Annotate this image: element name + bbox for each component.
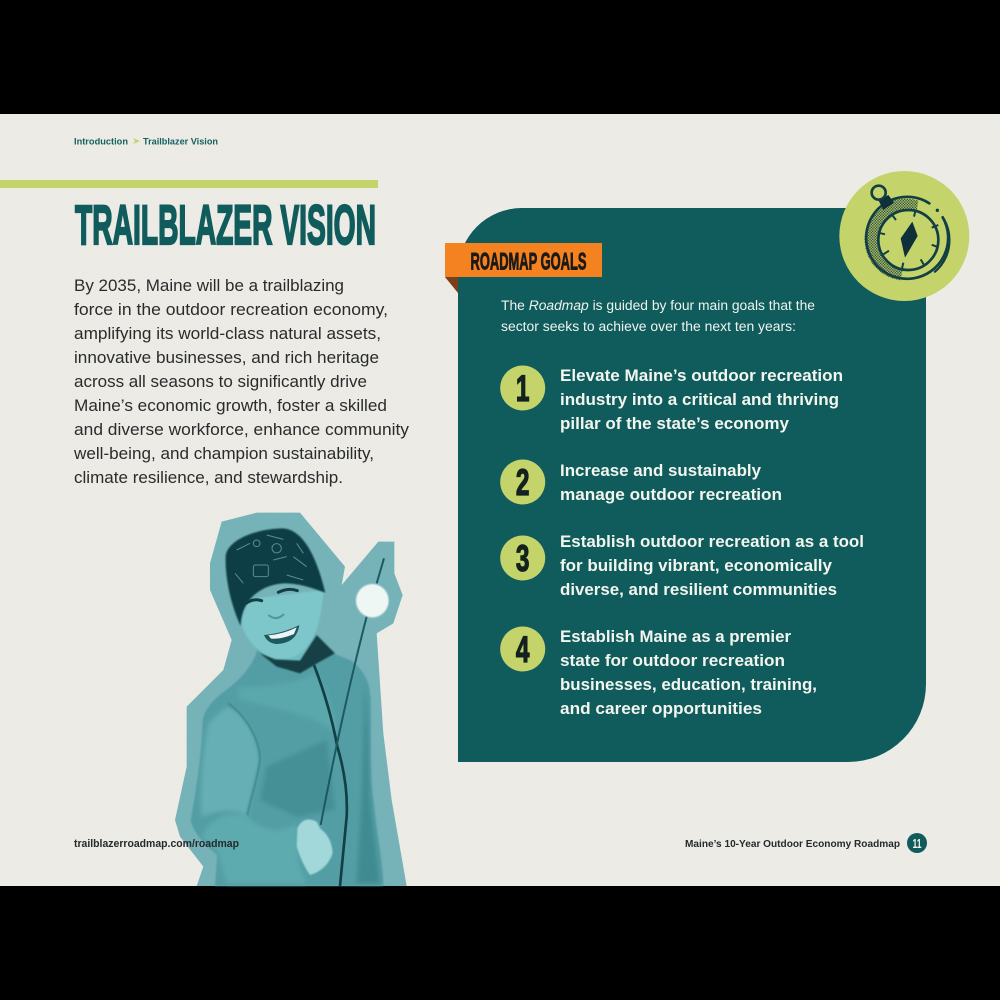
vision paragraph: amplifying its world-class natural assets,: [74, 324, 381, 343]
breadcrumb: Introduction: [74, 136, 128, 148]
collar: [260, 635, 335, 673]
compass dial: [878, 210, 938, 270]
compass ticks: [878, 210, 938, 270]
goal 2: Increase and sustainably: [560, 461, 762, 480]
footer title: Maine’s 10-Year Outdoor Economy Roadmap: [685, 838, 900, 850]
page number: [907, 833, 927, 853]
page number: 11: [912, 836, 922, 851]
compass loop: [872, 186, 886, 200]
goal 3: diverse, and resilient communities: [560, 580, 837, 599]
title: TRAILBLAZER VISION: [75, 193, 376, 256]
intro text: The Roadmap is guided by four main goals that the: [501, 298, 815, 313]
goal 1: industry into a critical and thriving: [560, 390, 839, 409]
ribbon fold: [445, 277, 458, 293]
vision paragraph: Maine’s economic growth, foster a skilled: [74, 396, 387, 415]
eyes and nose: [246, 589, 297, 603]
goal 4: businesses, education, training,: [560, 675, 817, 694]
goal 4: 4: [516, 629, 530, 670]
headscarf pattern: [235, 535, 307, 583]
intro text: sector seeks to achieve over the next ten years:: [501, 319, 796, 334]
photo: smiling child holding a marshmallow on a stick: [175, 513, 407, 886]
vision paragraph: well-being, and champion sustainability,: [73, 444, 374, 463]
goal 4: [500, 626, 817, 718]
panel background: [458, 208, 926, 762]
compass outer arc right: [935, 219, 949, 272]
vision paragraph: and diverse workforce, enhance community: [74, 420, 410, 439]
goal 1: [500, 366, 843, 433]
vision paragraph: climate resilience, and stewardship.: [74, 468, 343, 487]
vision paragraph: force in the outdoor recreation economy,: [74, 300, 388, 319]
photo backdrop cutout: [175, 513, 407, 886]
zipper: [314, 665, 347, 886]
fleece jacket: [191, 650, 383, 886]
intro text: [501, 298, 815, 334]
compass shaded rim: [865, 199, 918, 280]
breadcrumb: [74, 136, 218, 148]
icon: compass badge: [839, 171, 969, 301]
breadcrumb: Trailblazer Vision: [143, 136, 218, 148]
compass dot: [936, 209, 939, 212]
goal 3: 3: [516, 538, 529, 579]
goal 2: 2: [516, 462, 529, 503]
face: [240, 590, 324, 659]
vision paragraph: By 2035, Maine will be a trailblazing: [74, 276, 344, 295]
goal 4: Establish Maine as a premier: [560, 627, 791, 646]
ribbon heading: ROADMAP GOALS: [470, 248, 586, 276]
vision paragraph: innovative businesses, and rich heritage: [74, 348, 379, 367]
goal 4: state for outdoor recreation: [560, 651, 785, 670]
vision paragraph: across all seasons to significantly drive: [74, 372, 367, 391]
page background: [0, 114, 1000, 886]
roasting stick: [321, 558, 384, 825]
compass crown: [879, 195, 894, 210]
goal 3: Establish outdoor recreation as a tool: [560, 532, 864, 551]
jacket shading: [201, 673, 380, 883]
sleeve seam: [228, 703, 260, 815]
headscarf: [226, 528, 325, 626]
title accent bar: [0, 180, 378, 188]
goal 1: pillar of the state’s economy: [560, 414, 790, 433]
smile: [264, 625, 299, 644]
teeth: [268, 627, 297, 639]
goal 2: manage outdoor recreation: [560, 485, 782, 504]
compass outer ring: [866, 197, 948, 279]
compass needle: [901, 222, 918, 258]
footer url: trailblazerroadmap.com/roadmap: [74, 838, 239, 850]
panel: roadmap goals: [445, 208, 926, 762]
goal 3: [500, 532, 864, 599]
goal 4: and career opportunities: [560, 699, 762, 718]
goal 1: 1: [516, 368, 529, 409]
fist: [297, 819, 333, 875]
vision paragraph: [73, 276, 410, 487]
goal 3: for building vibrant, economically: [560, 556, 833, 575]
orange ribbon: [445, 243, 602, 277]
goal 2: [500, 460, 782, 504]
marshmallow: [356, 584, 389, 617]
nose: [268, 614, 284, 618]
goal 1: Elevate Maine’s outdoor recreation: [560, 366, 843, 385]
neck: [260, 637, 317, 663]
